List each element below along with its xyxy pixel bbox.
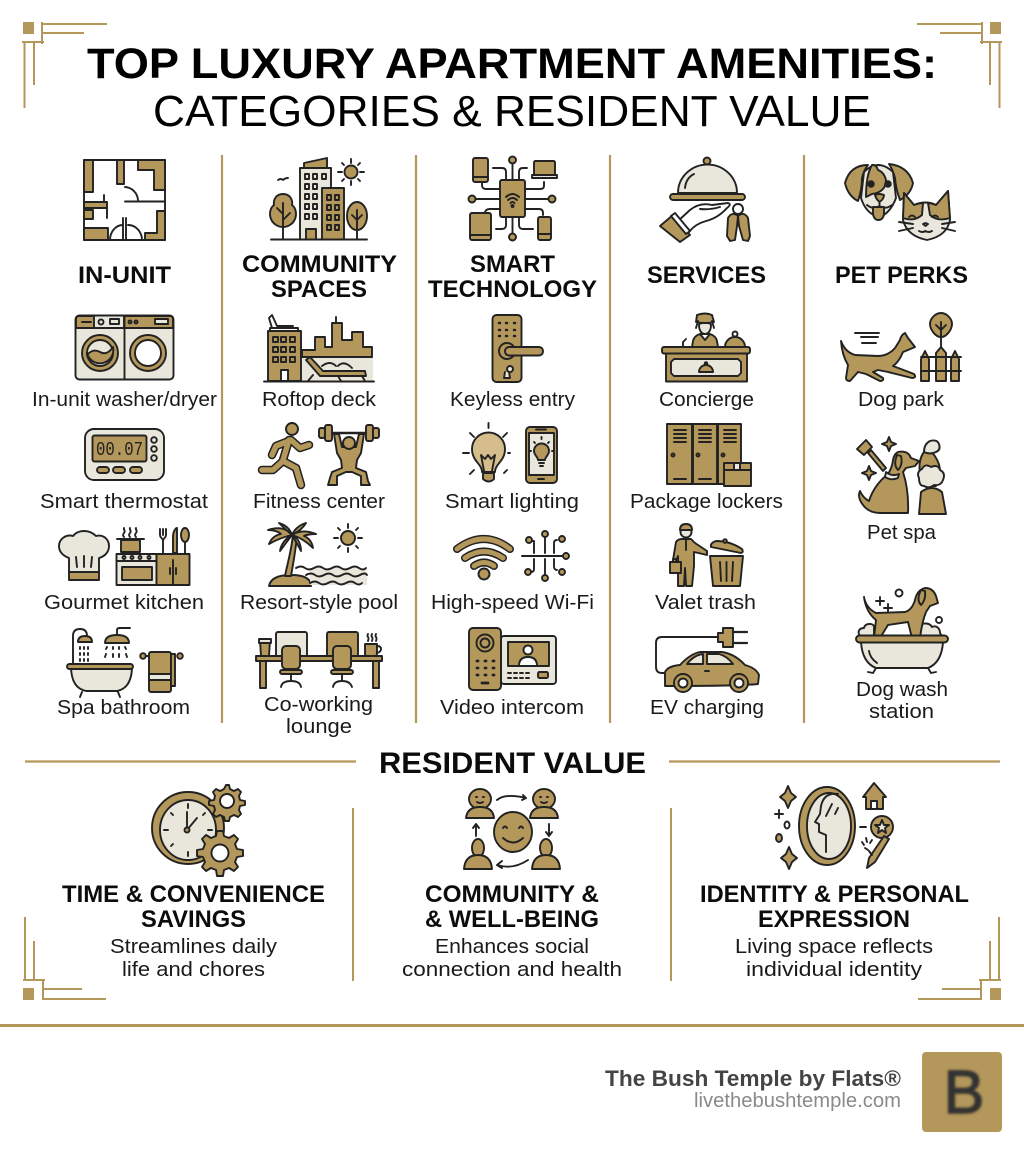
heading: time and convenience savings: SAVINGS (141, 906, 246, 933)
heading: in-unit: IN-UNIT (78, 262, 171, 289)
panel: community spaces (240, 158, 398, 738)
heading: smart technology: SMART (470, 251, 555, 278)
corner ornament: bottom right (918, 917, 1001, 1000)
icon: video intercom (469, 628, 556, 690)
label: ev charging: EV charging (650, 696, 764, 719)
heading: time and convenience savings: TIME & CONVENIENCE (62, 881, 325, 908)
icon: high-speed wi-fi (457, 531, 569, 581)
label: video intercom: Video intercom (440, 696, 584, 719)
icon: smart lighting (463, 423, 557, 483)
description: social connection and health (402, 935, 622, 981)
label: package lockers: Package lockers (630, 490, 783, 513)
heading: community and well-being: COMMUNITY & (425, 881, 599, 908)
icon: package lockers (667, 424, 751, 486)
panel: identity and personal expression (700, 783, 969, 981)
panel: community and well-being (402, 789, 622, 981)
icon: floor plan (84, 160, 165, 240)
icon: smart thermostat (85, 429, 164, 480)
section heading: resident value: RESIDENT VALUE (379, 747, 646, 780)
column dividers (222, 155, 804, 723)
icon: dog and cat faces (845, 164, 955, 240)
heading: smart technology (428, 251, 597, 303)
label: concierge: Concierge (659, 388, 754, 411)
label: dog park: Dog park (858, 388, 945, 411)
label: gourmet kitchen: Gourmet kitchen (44, 591, 204, 614)
panel: in-unit (32, 160, 217, 719)
icon: cloche, hand and keys (660, 158, 750, 242)
heading: community and well-being: & WELL-BEING (425, 906, 599, 933)
label: co-working lounge (264, 693, 373, 738)
label: dog wash station (856, 678, 948, 723)
corner ornament: bottom left (23, 917, 106, 1000)
icon: clock and gears (152, 785, 245, 876)
panel: time and convenience (62, 785, 325, 981)
label: resort-style pool: Resort-style pool (240, 591, 398, 614)
label: fitness center: Fitness center (253, 490, 385, 513)
description: streamlines daily life: Streamlines daily (110, 935, 278, 958)
label: co-working lounge: Co-working (264, 693, 373, 716)
label: smart lighting: Smart lighting (445, 490, 579, 513)
icon: fitness center (262, 423, 379, 485)
label: smart thermostat: Smart thermostat (40, 490, 208, 513)
icon: rooftop deck (264, 315, 374, 382)
icon: keyless entry (492, 315, 543, 382)
corner ornament: top left (22, 22, 107, 108)
heading: community and well-being (425, 881, 599, 933)
heading: community spaces: SPACES (271, 276, 367, 303)
label: pet spa: Pet spa (867, 521, 937, 544)
heading: identity and personal expression: IDENTITY & PERSONAL (700, 881, 969, 908)
heading: identity and personal expression (700, 881, 969, 933)
label: spa bathroom: Spa bathroom (57, 696, 190, 719)
logo badge: B (944, 1058, 984, 1126)
description: social connection and health: connection and health (402, 958, 622, 981)
heading: smart technology: TECHNOLOGY (428, 276, 597, 303)
icon: dog park (841, 313, 961, 381)
icon: dog wash station (856, 588, 948, 673)
value dividers (353, 808, 671, 981)
icon: community buildings (270, 158, 367, 240)
description: streamlines daily life (110, 935, 278, 981)
footer brand: The Bush Temple by Flats® (605, 1066, 901, 1091)
panel: services (630, 158, 783, 719)
heading: community spaces (242, 251, 397, 303)
description: individual identity: individual identity (746, 958, 923, 981)
label: dog wash station: station (869, 700, 934, 723)
icon: connected devices (468, 156, 557, 240)
corner ornament: top right (917, 22, 1002, 108)
heading: pet perks: PET PERKS (835, 262, 968, 289)
heading: services: SERVICES (647, 262, 766, 289)
icon: mirror and self-expression (775, 783, 893, 869)
icon: spa bathroom (67, 628, 183, 697)
heading: community spaces: COMMUNITY (242, 251, 397, 278)
icon: valet trash (670, 524, 743, 586)
title: CATEGORIES & RESIDENT VALUE (153, 87, 871, 136)
description: social connection and health: Enhances social (435, 935, 589, 958)
label: high-speed wi-fi: High-speed Wi-Fi (431, 591, 594, 614)
footer brand (605, 1066, 901, 1112)
title (87, 40, 937, 136)
heading: identity and personal expression: EXPRESSION (758, 906, 910, 933)
panel: smart technology (428, 156, 597, 719)
label: dog wash station: Dog wash (856, 678, 948, 701)
icon: ev charging (656, 628, 759, 692)
panel: pet perks (835, 164, 968, 723)
description: individual identity (735, 935, 933, 981)
icon: gourmet kitchen (59, 528, 190, 585)
icon: washer and dryer (76, 316, 174, 380)
icon: resort-style pool (268, 523, 367, 586)
icon: smart thermostat: 00.07 (96, 439, 143, 461)
icon: pet spa (857, 437, 946, 514)
heading: time and convenience savings (62, 881, 325, 933)
icon: connected people (464, 789, 560, 869)
footer divider (0, 1024, 1024, 1027)
label: in-unit washer/dryer: In-unit washer/dryer (32, 388, 217, 411)
label: rooftop deck: Roftop deck (262, 388, 377, 411)
icon: co-working lounge (256, 632, 382, 688)
label: valet trash: Valet trash (655, 591, 756, 614)
description: individual identity: Living space reflects (735, 935, 933, 958)
label: keyless entry: Keyless entry (450, 388, 576, 411)
logo badge (922, 1052, 1002, 1132)
icon: concierge desk (662, 314, 750, 382)
label: co-working lounge: lounge (286, 715, 352, 738)
title: TOP LUXURY APARTMENT AMENITIES: (87, 40, 937, 88)
description: streamlines daily life: life and chores (122, 958, 265, 981)
footer brand: livethebushtemple.com (694, 1090, 901, 1112)
